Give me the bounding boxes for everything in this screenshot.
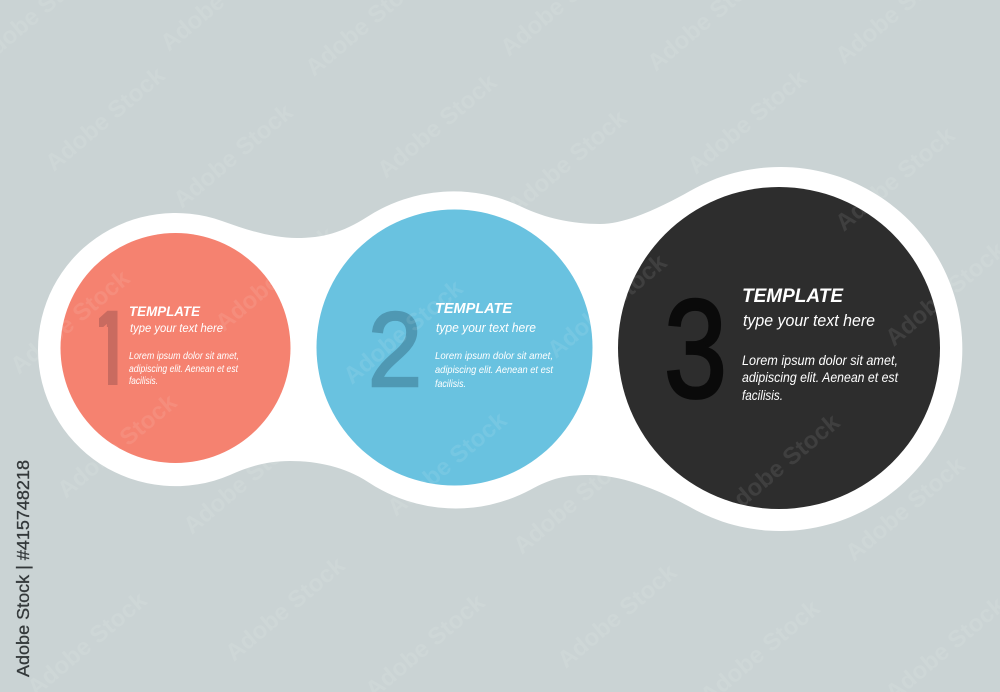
body text bbox=[742, 352, 899, 403]
stock watermarks: Adobe Stock bbox=[178, 424, 309, 540]
heading: TEMPLATE: TEMPLATE bbox=[129, 303, 201, 319]
stock watermarks: Adobe Stock bbox=[502, 104, 633, 220]
body text: facilisis. bbox=[742, 387, 783, 403]
stock watermarks: Adobe Stock bbox=[840, 451, 971, 567]
body text: Lorem ipsum dolor sit amet, bbox=[129, 351, 239, 362]
number 1: 1 bbox=[88, 287, 133, 412]
stock watermarks: Adobe Stock bbox=[382, 406, 513, 522]
body text: adipiscing elit. Aenean et est bbox=[742, 369, 899, 385]
stock watermarks: Adobe Stock bbox=[508, 444, 639, 560]
dark circle bbox=[618, 187, 940, 509]
red circle bbox=[60, 233, 290, 463]
body text: facilisis. bbox=[129, 376, 158, 387]
stock watermarks: Adobe Stock bbox=[542, 248, 673, 364]
stock watermarks: Adobe Stock bbox=[552, 558, 683, 674]
panel: step 2 bbox=[316, 210, 592, 486]
stock watermarks: Adobe Stock bbox=[220, 551, 351, 667]
number 3: 3 bbox=[664, 270, 727, 427]
stock watermarks: Adobe Stock bbox=[40, 61, 171, 177]
body text bbox=[435, 350, 554, 390]
body text bbox=[129, 351, 239, 387]
body text: facilisis. bbox=[435, 378, 466, 390]
body text: Lorem ipsum dolor sit amet, bbox=[435, 350, 553, 362]
number 2: 2 bbox=[368, 291, 422, 409]
white connected blob outline bbox=[38, 167, 962, 531]
heading: TEMPLATE: TEMPLATE bbox=[742, 286, 844, 307]
blue circle bbox=[316, 210, 592, 486]
subheading: type your text here bbox=[743, 312, 875, 330]
subheading: type your text here bbox=[130, 321, 223, 335]
body text: Lorem ipsum dolor sit amet, bbox=[742, 352, 898, 368]
panel: step 1 bbox=[60, 233, 290, 463]
stock watermarks: Adobe Stock bbox=[338, 274, 469, 390]
stock watermarks: Adobe Stock bbox=[168, 98, 299, 214]
stock watermarks: Adobe Stock bbox=[372, 68, 503, 184]
stock watermarks: Adobe Stock bbox=[210, 221, 341, 337]
stock watermarks: Adobe Stock bbox=[5, 264, 136, 380]
heading: TEMPLATE: TEMPLATE bbox=[435, 300, 513, 317]
body text: adipiscing elit. Aenean et est bbox=[435, 364, 554, 376]
panel: step 3 bbox=[618, 187, 940, 509]
stock watermarks: Adobe Stock bbox=[830, 121, 961, 237]
subheading: type your text here bbox=[436, 320, 536, 335]
stock ID vertical label: Adobe Stock | #415748218 bbox=[13, 460, 33, 677]
body text: adipiscing elit. Aenean et est bbox=[129, 364, 239, 375]
stock watermarks: Adobe Stock bbox=[682, 64, 813, 180]
stock watermarks: Adobe Stock bbox=[715, 408, 846, 524]
stock watermarks: Adobe Stock bbox=[52, 388, 183, 504]
